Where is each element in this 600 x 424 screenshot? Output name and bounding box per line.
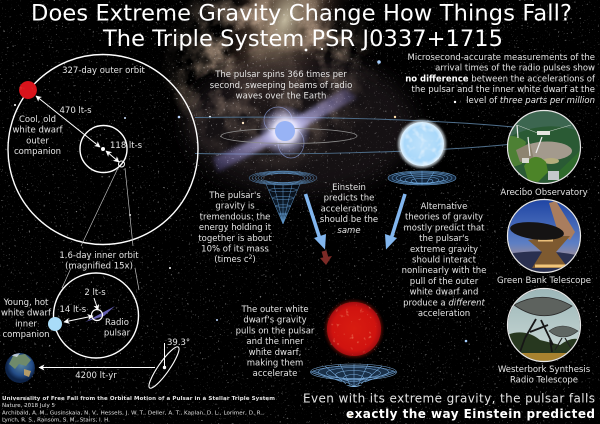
- red outer white dwarf illustration: [323, 298, 385, 360]
- arrow: 14 lt-s: [64, 316, 93, 322]
- center dot: [163, 366, 166, 369]
- text: outer white dwarf pull: making them: [247, 358, 303, 368]
- arrow: to Earth: [39, 366, 155, 368]
- distance arrow and inclination: [39, 338, 190, 391]
- text: alternative theories: should interact: [412, 256, 477, 266]
- icon: Earth: [5, 353, 35, 383]
- text: outer white dwarf pull: accelerate: [253, 369, 297, 379]
- label: inner orbit: 1.6-day inner orbit: [59, 251, 139, 261]
- text: alternative theories: acceleration: [418, 309, 470, 319]
- text: microsecond measurements: arrival times of the radio pulses show: [435, 64, 595, 74]
- text: alternative theories: mostly predict that: [404, 223, 485, 233]
- label: Westerbork: Westerbork Synthesis: [498, 365, 590, 375]
- arrow: acceleration of pulsar: [320, 251, 332, 265]
- inclination ellipse: [145, 344, 183, 391]
- text: Einstein prediction: accelerations: [321, 204, 378, 214]
- text: pulsar gravity: The pulsar's: [209, 191, 261, 201]
- label: inner companion: companion: [2, 330, 50, 340]
- photo: Arecibo Observatory: [507, 110, 581, 184]
- text: outer white dwarf pull: pulls on the pulsar: [236, 326, 315, 336]
- text: microsecond measurements: the pulsar and the inner white dwarf at the: [412, 85, 595, 95]
- text: alternative theories: extreme gravity: [410, 245, 478, 255]
- label: inner companion: white dwarf: [1, 309, 52, 319]
- text: outer white dwarf pull: The outer white: [241, 305, 309, 315]
- text: alternative theories: produce a different: [403, 298, 485, 308]
- text: pulsar gravity: 2: [249, 254, 253, 261]
- text: Einstein prediction: predicts the: [324, 194, 374, 204]
- text: alternative theories: white dwarf and: [410, 288, 478, 298]
- text: alternative theories: theories of gravity: [405, 213, 483, 223]
- text: microsecond measurements: no difference between the accelerations of: [405, 74, 595, 84]
- text: Einstein prediction: same: [337, 226, 361, 236]
- photo: Westerbork Synthesis Radio Telescope: [507, 288, 581, 362]
- label: 470 lt-s: 470 lt-s: [60, 106, 92, 116]
- magnification guide lines: [62, 168, 139, 290]
- outer orbit ring: [8, 54, 198, 244]
- diagram: outer orbit: [8, 54, 198, 244]
- inner orbit ring magnified: [54, 273, 138, 358]
- label: outer companion: Cool, old: [19, 115, 56, 125]
- text: alternative theories: Alternative: [421, 202, 467, 212]
- arrow: 118 lt-s: [106, 151, 119, 162]
- rotation ring: [221, 128, 357, 144]
- title: [31, 0, 572, 52]
- citation: Universality of Free Fall from the Orbital Motion of a Pulsar in a Stellar Triple System: [2, 396, 275, 402]
- text: alternative theories: pull of the outer: [410, 277, 479, 287]
- citation: Nature, 2018 July 5: [2, 403, 56, 409]
- pulsar glow: [259, 105, 311, 157]
- text: pulsar gravity: ): [252, 255, 256, 265]
- title: Does Extreme Gravity Change How Things Fall?: [31, 0, 572, 26]
- icon: inner white dwarf: [48, 317, 62, 331]
- text: pulsar spin: second, sweeping beams of radio: [210, 81, 352, 91]
- gravity well: outer white dwarf: [310, 364, 396, 387]
- label: 4200 lt-yr: 4200 lt-yr: [75, 371, 117, 381]
- text: Einstein prediction: Einstein: [332, 183, 366, 193]
- pulsar disc: [275, 121, 295, 141]
- text: pulsar gravity: energy holding it: [199, 223, 272, 233]
- label: radio pulsar: pulsar: [104, 329, 131, 339]
- diagram: inner orbit magnified: [1, 251, 139, 358]
- text: microsecond measurements: Microsecond-accurate measurements of the: [408, 53, 595, 63]
- text: pulsar spin: waves over the Earth: [236, 92, 326, 102]
- gravity well: inner white dwarf: [388, 171, 456, 185]
- citation: [2, 396, 275, 424]
- inner white dwarf illustration: [398, 120, 446, 168]
- inner binary marker: [118, 161, 124, 167]
- arrow: alternative theories prediction: [385, 194, 405, 250]
- label: angle: 39.3°: [167, 338, 190, 348]
- title: The Triple System PSR J0337+1715: [102, 26, 503, 52]
- text: outer white dwarf pull: white dwarf,: [249, 348, 301, 358]
- conclusion: [303, 392, 595, 421]
- icon: red outer white dwarf: [19, 81, 37, 99]
- text: alternative theories: the pulsar's: [419, 234, 469, 244]
- citation: Lynch, R. S., Ransom, S. M., Stairs, I. H.: [2, 418, 110, 424]
- text: pulsar gravity: gravity is: [215, 202, 255, 212]
- text: microsecond measurements: level of three parts per million: [466, 96, 595, 106]
- label: outer companion: companion: [14, 147, 61, 157]
- inner orbit ring: [80, 126, 127, 172]
- arrow: 470 lt-s: [36, 96, 100, 147]
- inclination axis: [164, 343, 166, 367]
- text: pulsar gravity: (times c: [214, 254, 256, 265]
- label: inner companion: inner: [15, 319, 37, 329]
- citation: Archibald, A. M., Gusinskaia, N. V., Hessels, J. W. T., Deller, A. T., Kaplan, D. L., Lorimer, D. R.,: [2, 410, 264, 416]
- label: Green Bank Telescope: Green Bank Telescope: [497, 276, 591, 286]
- label: outer orbit: 327-day outer orbit: [62, 66, 146, 76]
- orbital lines linking pulsar, white dwarf and telescopes: [195, 117, 513, 154]
- label: 118 lt-s: 118 lt-s: [110, 141, 143, 151]
- label: inner orbit: (magnified 15x): [65, 262, 133, 272]
- label: Westerbork: Radio Telescope: [510, 376, 578, 386]
- text: pulsar spin: The pulsar spins 366 times per: [215, 70, 347, 80]
- gravity well: pulsar: [249, 171, 317, 224]
- label: Arecibo Observatory: Arecibo Observatory: [500, 188, 588, 198]
- label: inner companion: Young, hot: [4, 298, 48, 308]
- arrow: Einstein prediction: [306, 194, 326, 250]
- text: pulsar gravity: 10% of its mass: [201, 244, 269, 254]
- beam lower left: [213, 126, 287, 172]
- conclusion: Even with its extreme gravity, the pulsar falls: [303, 392, 595, 406]
- arrow: 2 lt-s: [94, 298, 98, 310]
- text: outer white dwarf pull: and the inner: [246, 337, 304, 347]
- text: alternative theories: nonlinearly with the: [402, 266, 486, 276]
- text: outer white dwarf pull: dwarf's gravity: [243, 316, 307, 326]
- magnetic field loops: [264, 107, 304, 158]
- conclusion: exactly the way Einstein predicted: [346, 407, 595, 421]
- label: 14 lt-s: 14 lt-s: [60, 305, 87, 315]
- text: pulsar gravity: together is about: [198, 234, 272, 244]
- label: outer companion: white dwarf: [12, 126, 64, 136]
- pulsar orbit small: [92, 310, 102, 320]
- center of mass dot: [101, 147, 105, 151]
- label: 2 lt-s: 2 lt-s: [84, 288, 106, 298]
- text: pulsar gravity: tremendous: the: [200, 212, 270, 222]
- pulsar illustration: [213, 88, 357, 172]
- beam upper right: [282, 88, 357, 136]
- label: radio pulsar: Radio: [105, 318, 129, 328]
- photo: Green Bank Telescope: [507, 199, 581, 273]
- label: outer companion: outer: [26, 136, 49, 146]
- text: Einstein prediction: should be the: [320, 215, 378, 225]
- icon: pulsar beam: [85, 306, 115, 322]
